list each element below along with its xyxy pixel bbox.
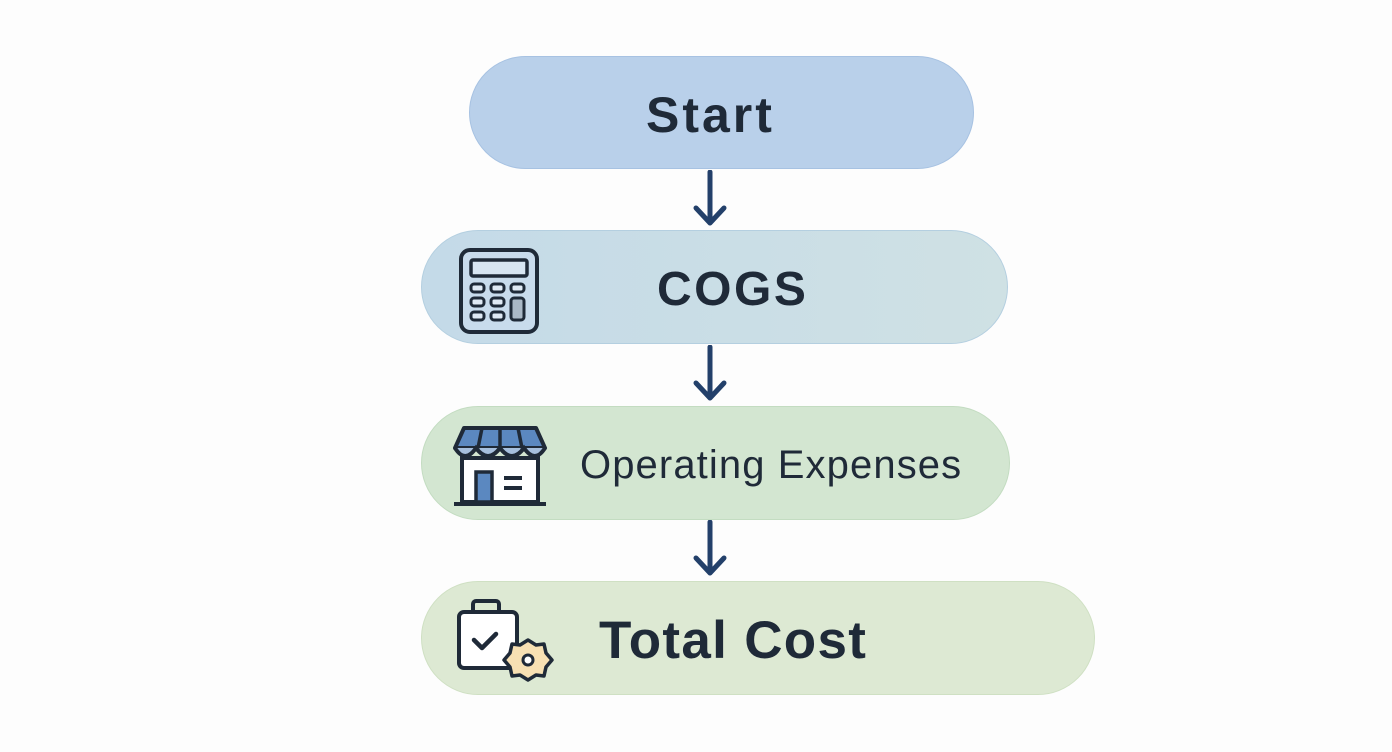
text: Operating Expenses: Operating Expenses [580,443,962,487]
pill: COGS [421,230,1008,344]
icon: calculator [459,248,539,334]
pill: Total Cost [421,581,1095,695]
arrow 1 [694,170,726,226]
icon: briefcase with gear [457,599,554,682]
text: Start: Start [646,87,775,143]
text: COGS: COGS [657,263,808,316]
icon: store [453,426,548,506]
arrow 2 [694,345,726,400]
pill: Start [469,56,974,169]
arrow 3 [694,520,726,576]
pill: Operating Expenses [421,406,1010,520]
text: Total Cost: Total Cost [599,611,867,670]
